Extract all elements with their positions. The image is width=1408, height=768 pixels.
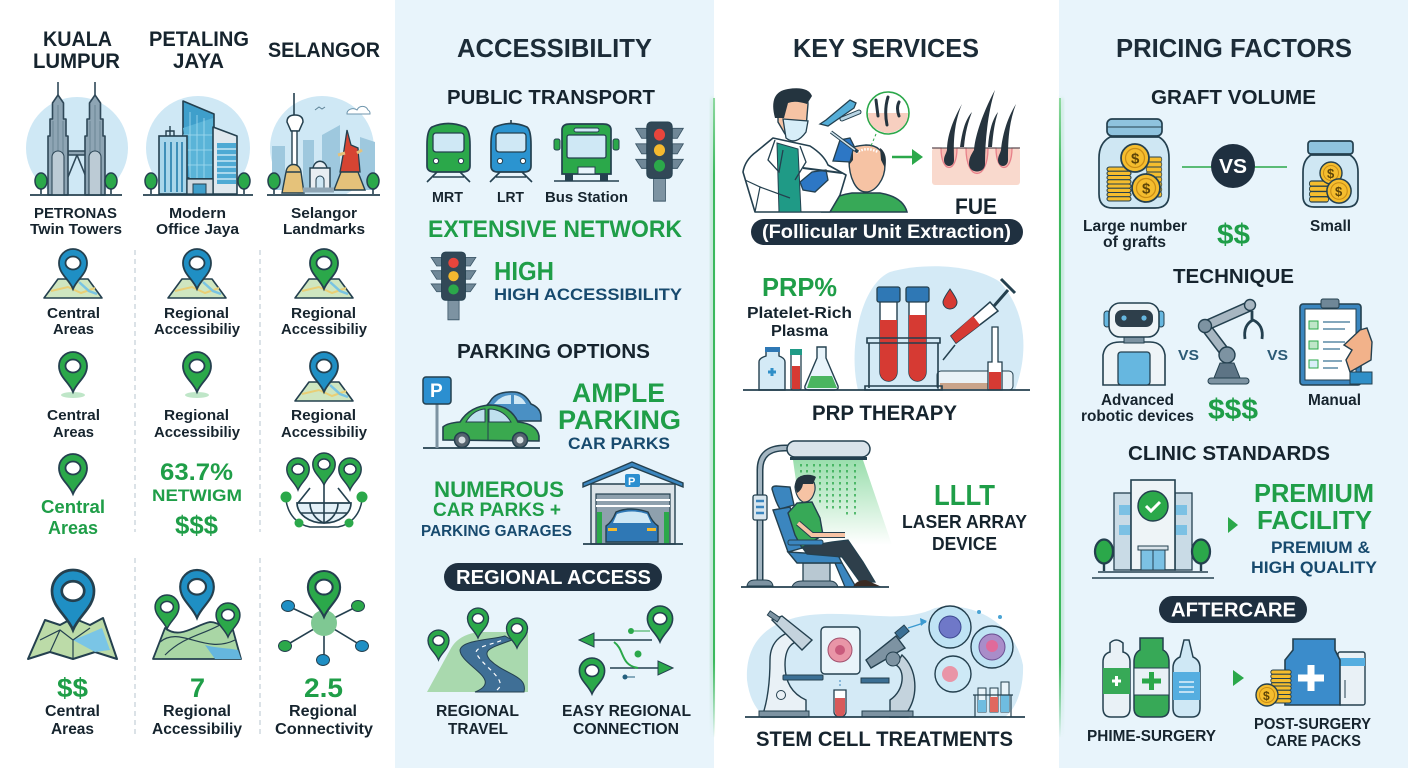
icon: manual clipboard	[1300, 299, 1372, 385]
callout: premium facility: PREMIUM &	[1271, 538, 1370, 557]
label: post-surgery care packs: CARE PACKS	[1266, 733, 1361, 750]
label: Regional Accessibility: Regional	[164, 306, 229, 322]
pill heading: regional access: REGIONAL ACCESS	[456, 567, 651, 589]
label: advanced robotic devices: Advanced	[1101, 392, 1174, 409]
label: manual: Manual	[1308, 392, 1361, 409]
callout: premium facility: FACILITY	[1257, 505, 1372, 535]
divider glow: key services and pricing	[1059, 98, 1064, 738]
icon: Selangor landmarks	[267, 93, 380, 200]
heading: Petaling Jaya	[149, 28, 249, 73]
heading: pricing factors: PRICING FACTORS	[1116, 33, 1352, 63]
illustration: LLLT laser device and chair	[741, 441, 892, 587]
callout: PRP platelet-rich plasma: Plasma	[771, 323, 828, 340]
subheading: parking options: PARKING OPTIONS	[457, 341, 650, 363]
stat: $$ central areas: Areas	[51, 721, 94, 738]
label: Regional Accessibility: Accessibiliy	[281, 425, 367, 441]
label: Central Areas green: Central	[41, 497, 105, 517]
icon: robotic arm	[1198, 300, 1262, 384]
panel: pricing factors	[1081, 33, 1378, 750]
callout: ample parking: PARKING	[558, 405, 681, 435]
stat: $$ central areas: $$	[57, 673, 88, 703]
text: modern office: Modern	[169, 206, 226, 222]
panel: locations	[26, 28, 380, 738]
subheading: clinic standards: CLINIC STANDARDS	[1128, 443, 1330, 465]
label: small: Small	[1310, 218, 1351, 235]
text: vs: VS	[1267, 347, 1288, 364]
callout: numerous car parks: CAR PARKS +	[433, 500, 561, 521]
label: PRP therapy: PRP THERAPY	[812, 402, 957, 425]
icon: modern office	[143, 96, 253, 200]
label: Regional Accessibility	[154, 408, 240, 441]
subheading: graft volume: GRAFT VOLUME	[1151, 87, 1316, 109]
callout: high accessibility	[494, 256, 683, 304]
label: large number of grafts: Large number	[1083, 218, 1187, 235]
panel: key services	[741, 33, 1030, 751]
icon: parking sign and cars	[423, 377, 541, 448]
panel: accessibility	[421, 33, 691, 738]
callout: LLLT laser array device: LLLT	[934, 480, 995, 512]
icon: globe with pins	[280, 453, 368, 528]
heading: Kuala Lumpur: LUMPUR	[33, 50, 120, 73]
label: Regional Accessibility: Accessibiliy	[154, 425, 240, 441]
icon: large coin jar	[1099, 119, 1169, 208]
icon: blue pin on map	[295, 352, 353, 401]
label: Central Areas: Central	[47, 306, 100, 322]
text: modern office	[156, 206, 240, 238]
callout: LLLT laser array device: LASER ARRAY	[902, 512, 1027, 532]
divider glow: accessibility and key services	[710, 98, 715, 738]
icon: green pin	[59, 352, 87, 398]
label: easy regional connection: EASY REGIONAL	[562, 703, 691, 720]
icon: map pin central areas	[44, 249, 102, 298]
label: post-surgery care packs	[1254, 716, 1372, 750]
label: Central Areas: Areas	[53, 322, 94, 338]
arrow: to follicle	[892, 149, 923, 165]
icon: large coin jar: $	[1131, 150, 1140, 168]
icon: parking sign and cars: P	[430, 381, 443, 402]
text: Petronas: Twin Towers	[30, 222, 122, 238]
callout: high accessibility: HIGH ACCESSIBILITY	[494, 285, 683, 304]
callout: ample parking	[558, 378, 681, 453]
pill: follicular unit extraction: (Follicular Unit Extraction)	[762, 222, 1011, 243]
label: Regional Accessibility	[281, 306, 367, 338]
callout: PRP platelet-rich plasma	[747, 272, 852, 340]
subheading: public transport: PUBLIC TRANSPORT	[447, 87, 655, 109]
background: pricing factors panel	[1059, 0, 1408, 768]
illustration: stem cell lab	[745, 606, 1025, 717]
text: Selangor landmarks: Selangor	[291, 206, 357, 222]
icon: robot	[1103, 303, 1165, 385]
icon: green pin	[59, 454, 87, 494]
icon: large coin jar: $	[1142, 180, 1151, 198]
icon: post-surgery care pack: $	[1263, 689, 1270, 703]
label: Central Areas: Areas	[53, 425, 94, 441]
stat: 63.7% network	[152, 459, 242, 540]
label: Regional Accessibility	[281, 408, 367, 441]
label: FUE: FUE	[955, 194, 997, 219]
stat: 7 regional accessibility	[152, 673, 242, 738]
label: regional travel	[436, 703, 519, 738]
text: Petronas: PETRONAS	[34, 206, 117, 222]
callout: ample parking: CAR PARKS	[568, 434, 670, 453]
label: Central Areas green	[41, 497, 105, 538]
icon: map pin regional	[168, 249, 226, 298]
callout: numerous car parks	[421, 477, 572, 540]
icon: small coin jar: $	[1327, 166, 1335, 181]
icon: MRT train	[427, 124, 470, 182]
callout: numerous car parks: PARKING GARAGES	[421, 523, 572, 540]
arrow: to premium facility	[1228, 517, 1238, 533]
stat: 63.7% network: 63.7%	[160, 459, 233, 486]
label: Regional Accessibility: Regional	[291, 306, 356, 322]
label: Regional Accessibility	[154, 306, 240, 338]
label: regional travel: TRAVEL	[448, 721, 508, 738]
icon: green pin	[183, 352, 211, 398]
icon: Petronas Twin Towers	[26, 82, 128, 199]
icon: easy regional connection arrows	[579, 606, 673, 694]
illustration: PRP tubes and syringe	[743, 266, 1030, 390]
comparison: vs badge	[1182, 144, 1287, 188]
label: Central Areas: Central	[47, 408, 100, 424]
icon: bus	[554, 124, 619, 181]
stat: 2.5 regional connectivity: Connectivity	[275, 721, 373, 738]
label: Central Areas	[47, 306, 100, 338]
pill heading: regional access	[444, 563, 662, 591]
heading: Kuala Lumpur	[33, 28, 120, 73]
label: Regional Accessibility: Regional	[164, 408, 229, 424]
icon: large map with pin	[28, 570, 117, 659]
pill heading: aftercare	[1159, 596, 1307, 623]
callout: numerous car parks: NUMEROUS	[434, 477, 564, 502]
pill heading: aftercare: AFTERCARE	[1171, 600, 1296, 622]
label: Regional Accessibility: Regional	[291, 408, 356, 424]
label: easy regional connection	[562, 703, 691, 738]
labels: transport modes: MRT	[432, 190, 463, 206]
label: easy regional connection: CONNECTION	[573, 721, 679, 738]
callout: premium facility	[1251, 478, 1378, 577]
callout: extensive network: EXTENSIVE NETWORK	[428, 216, 683, 243]
illustration: FUE doctor and patient	[743, 88, 909, 212]
stat: 7 regional accessibility: 7	[190, 673, 205, 703]
stat: 63.7% network: $$$	[175, 510, 219, 540]
icon: clinic building	[1092, 480, 1214, 578]
icon: small coin jar: $	[1335, 184, 1343, 199]
callout: high accessibility: HIGH	[494, 256, 554, 286]
heading: accessibility: ACCESSIBILITY	[457, 33, 652, 63]
column dividers	[135, 250, 260, 735]
heading: key services: KEY SERVICES	[793, 33, 979, 63]
label: Regional Accessibility: Accessibiliy	[281, 322, 367, 338]
icon: post-surgery care pack	[1256, 639, 1365, 706]
stat: 2.5 regional connectivity: 2.5	[304, 673, 343, 703]
heading: Selangor: SELANGOR	[268, 39, 380, 62]
subheading: technique: TECHNIQUE	[1173, 266, 1294, 288]
stat: 2.5 regional connectivity	[275, 673, 373, 738]
text: modern office: Office Jaya	[156, 222, 240, 238]
callout: PRP platelet-rich plasma: Platelet-Rich	[747, 305, 852, 322]
callout: ample parking: AMPLE	[572, 378, 665, 408]
callout: premium facility: PREMIUM	[1254, 478, 1374, 508]
text: vs: VS	[1178, 347, 1199, 364]
background: accessibility panel	[395, 0, 714, 768]
callout: LLLT laser array device: DEVICE	[932, 534, 997, 554]
comparison: vs badge: VS	[1219, 156, 1247, 178]
stat: 63.7% network: NETWIGM	[152, 486, 242, 505]
label: Regional Accessibility: Accessibiliy	[154, 322, 240, 338]
stat: 7 regional accessibility: Accessibiliy	[152, 721, 242, 738]
label: advanced robotic devices: robotic devices	[1081, 408, 1194, 425]
icon: traffic light	[636, 122, 683, 201]
labels: transport modes	[432, 190, 628, 206]
icon: regional travel road and pins	[427, 608, 528, 692]
price: $$$: $$$	[1208, 394, 1258, 426]
text: Selangor landmarks	[283, 206, 365, 238]
stat: $$ central areas	[45, 673, 100, 738]
label: Central Areas green: Areas	[48, 518, 98, 538]
price: $$: $$	[1217, 219, 1250, 251]
label: Central Areas	[47, 408, 100, 441]
callout: PRP platelet-rich plasma: PRP%	[762, 272, 837, 302]
callout: LLLT laser array device	[902, 480, 1027, 554]
icon: small coin jar	[1303, 141, 1358, 207]
label: advanced robotic devices	[1081, 392, 1194, 425]
icon: hair follicles	[932, 90, 1020, 185]
icon: terrain map with pins	[153, 570, 241, 659]
label: post-surgery care packs: POST-SURGERY	[1254, 716, 1372, 733]
icon: pre-surgery bottles	[1103, 638, 1200, 717]
stat: 2.5 regional connectivity: Regional	[289, 703, 357, 720]
icon: LRT train	[490, 120, 532, 182]
icon: parking garage: P	[628, 476, 635, 488]
stat: $$ central areas: Central	[45, 703, 100, 720]
heading: Petaling Jaya: JAYA	[173, 50, 224, 73]
label: stem cell treatments: STEM CELL TREATMENTS	[756, 728, 1013, 751]
heading: Petaling Jaya: PETALING	[149, 28, 249, 51]
text: Selangor landmarks: Landmarks	[283, 222, 365, 238]
stat: 7 regional accessibility: Regional	[163, 703, 231, 720]
label: large number of grafts	[1083, 218, 1187, 251]
text: Petronas	[30, 206, 122, 238]
icon: green pin on map	[295, 249, 353, 298]
label: large number of grafts: of grafts	[1103, 234, 1166, 251]
heading: Kuala Lumpur: KUALA	[43, 28, 112, 51]
icon: parking garage	[583, 462, 683, 544]
label: regional travel: REGIONAL	[436, 703, 519, 720]
icon: connectivity network	[278, 571, 368, 666]
labels: transport modes: Bus Station	[545, 190, 628, 206]
labels: transport modes: LRT	[497, 190, 524, 206]
callout: premium facility: HIGH QUALITY	[1251, 558, 1378, 577]
icon: traffic light small	[431, 252, 476, 320]
arrow: to post-surgery	[1233, 670, 1244, 686]
label: pre-surgery: PHIME-SURGERY	[1087, 728, 1217, 745]
